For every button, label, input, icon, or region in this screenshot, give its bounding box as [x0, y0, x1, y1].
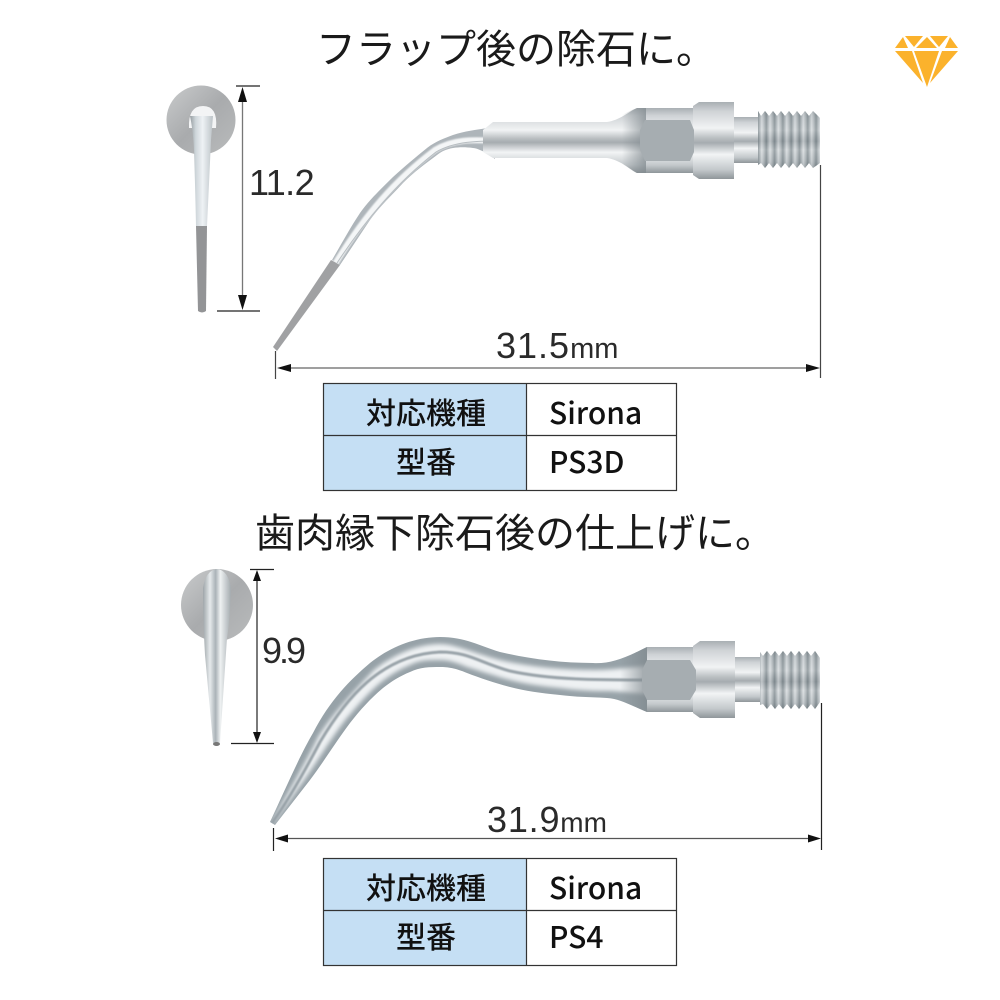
table: top specs: PS3D: [549, 438, 624, 482]
table: bottom specs: 対応機種: [366, 864, 486, 908]
thread: [760, 651, 820, 709]
hex flat: [640, 120, 694, 161]
table: top specs: Sirona: [549, 389, 642, 433]
table: bottom specs: 型番: [396, 913, 456, 957]
dimension: 9.9: 9.9: [262, 630, 305, 671]
title: top heading: フラップ後の除石に。: [316, 17, 716, 75]
diamond-coated section: [273, 260, 340, 351]
shaft and flare: [483, 108, 647, 173]
dimension: 31.9mm: 31.9mm: [487, 799, 607, 840]
thread: [758, 111, 820, 168]
table: top specs: [324, 384, 676, 490]
body and collar: [647, 647, 693, 712]
dimension: 31.5mm: [276, 165, 820, 379]
title: bottom heading: 歯肉縁下除石後の仕上げに。: [255, 501, 775, 559]
side view: bottom tip: [265, 630, 820, 830]
collar and body: [646, 108, 693, 173]
table: top specs: 対応機種: [366, 389, 486, 433]
dimension: 31.5mm: 31.5mm: [496, 325, 618, 366]
dimension: 11.2: [217, 86, 314, 311]
table: bottom specs: [324, 858, 676, 966]
table: bottom specs: Sirona: [549, 864, 642, 908]
dimension: 9.9: [231, 570, 305, 744]
table: top specs: 型番: [396, 438, 456, 482]
front view: top tip: [166, 86, 236, 312]
hex flat: [642, 660, 696, 700]
icon: diamond: [895, 36, 958, 87]
curved neck: [332, 128, 495, 265]
side view: top tip: [273, 102, 820, 351]
table: bottom specs: PS4: [549, 913, 603, 957]
dimension: 31.9mm: [274, 703, 822, 851]
front view: bottom tip: [181, 569, 253, 746]
dimension: 11.2: 11.2: [249, 162, 314, 203]
